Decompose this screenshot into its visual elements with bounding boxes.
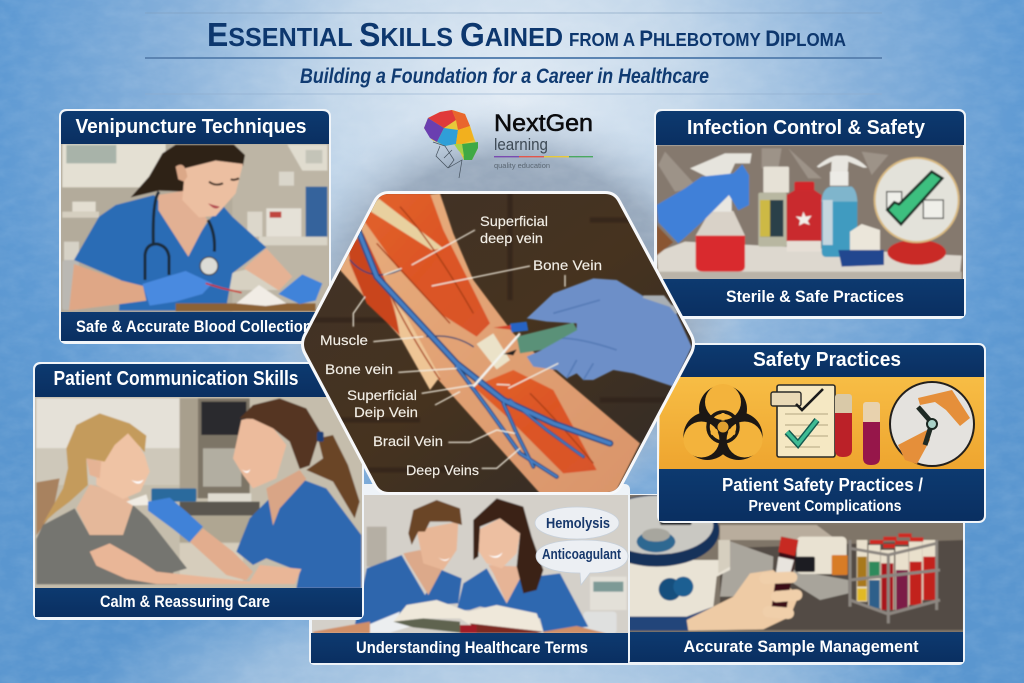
- blue box: [838, 250, 884, 267]
- needle and gauze: [206, 283, 242, 293]
- muscles: [363, 193, 490, 337]
- bottle one: [763, 167, 789, 193]
- icon: polygon brain: [424, 110, 478, 178]
- icon: blood tubes: [835, 394, 880, 465]
- header: [660, 345, 984, 377]
- heading continuation: FROM A PHLEBOTOMY DIPLOMA: [569, 26, 846, 51]
- stethoscope: [145, 192, 215, 280]
- red bottle: [794, 182, 814, 191]
- tagline: quality education: [494, 161, 550, 170]
- caption: Calm & Reassuring Care: [100, 593, 270, 611]
- wordmark second line: learning: [494, 135, 548, 154]
- nurse arms: [190, 528, 253, 580]
- syringe: [517, 323, 577, 353]
- title block: [145, 12, 882, 94]
- nurse hair: [240, 398, 320, 469]
- photo: two students with a book: [310, 490, 630, 637]
- banner: [659, 377, 984, 469]
- veins: [350, 227, 610, 477]
- male student: [355, 555, 462, 625]
- footer: [612, 632, 963, 662]
- check badge: [887, 240, 946, 265]
- arm: [340, 193, 640, 493]
- term: Anticoagulant: [542, 547, 621, 563]
- header: [61, 111, 329, 144]
- arms: [313, 622, 607, 633]
- text: Deip Vein: [354, 404, 418, 420]
- patient: [36, 505, 187, 584]
- nurse neck: [266, 470, 306, 526]
- label: Superficial deep vein: [480, 213, 548, 246]
- rainbow rule: [494, 156, 593, 157]
- face: [182, 161, 243, 217]
- panel: arm anatomy hexagon: [295, 190, 700, 500]
- female student: [457, 568, 588, 632]
- glove: [148, 498, 203, 542]
- label: Bracil Vein: Bracil Vein: [373, 433, 443, 449]
- heading: Patient Communication Skills: [54, 367, 298, 390]
- centrifuge: [627, 560, 730, 617]
- gloved hand holding tube: [687, 570, 798, 631]
- gloves: [142, 271, 212, 306]
- label: Muscle: Muscle: [320, 332, 368, 348]
- footer: [659, 469, 984, 521]
- heading: ESSENTIAL SKILLS GAINED: [207, 16, 563, 53]
- caption: Understanding Healthcare Terms: [356, 639, 588, 657]
- neck and chest: [158, 190, 207, 257]
- label: Bone vein: Bone vein: [325, 361, 393, 377]
- footer: [61, 312, 329, 341]
- header: [35, 364, 362, 397]
- panel: infection control: [654, 109, 966, 319]
- white box: [850, 224, 880, 250]
- text: deep vein: [480, 230, 543, 246]
- footer: [311, 633, 628, 663]
- panel: venipuncture techniques: [59, 109, 331, 344]
- caption: Safe & Accurate Blood Collection: [76, 318, 312, 336]
- photo: centrifuge and rack: [630, 495, 963, 632]
- icon: hand with tourniquet: [890, 382, 974, 466]
- panel: patient communication: [33, 362, 365, 620]
- label: Deep Veins: Deep Veins: [406, 462, 479, 478]
- speech bubble: Hemolysis: [535, 507, 619, 539]
- caption: Accurate Sample Management: [684, 638, 919, 656]
- photo: nurse drawing blood: [59, 140, 331, 315]
- glove: [527, 278, 692, 387]
- caption: Sterile & Safe Practices: [726, 288, 904, 306]
- speech bubble: Anticoagulant: [536, 540, 628, 585]
- torso: [74, 195, 266, 311]
- logo: NextGen learning: [424, 110, 593, 178]
- arms: [69, 264, 146, 311]
- spray bottle: [695, 210, 746, 238]
- rack tubes: [857, 540, 867, 602]
- term: Hemolysis: [546, 516, 610, 532]
- pump bottle: [817, 156, 867, 172]
- heading: Safety Practices: [753, 348, 901, 371]
- heading: Infection Control & Safety: [687, 116, 926, 139]
- footer: [35, 588, 362, 617]
- book: [393, 600, 543, 632]
- photo: nurse reassuring patient: [33, 395, 365, 590]
- nurse torso: [236, 478, 361, 588]
- ponytail: [306, 435, 360, 518]
- icon: checklist: [771, 385, 835, 457]
- nurse face: [233, 415, 286, 488]
- leader lines: [353, 230, 565, 468]
- caption line 1: Patient Safety Practices /: [722, 475, 923, 495]
- wordmark: NextGen: [494, 110, 593, 137]
- photo: disinfection supplies: [655, 145, 965, 280]
- footer: [656, 279, 964, 316]
- panel: safety practices: [657, 343, 986, 523]
- tendon wrap: [477, 333, 510, 369]
- header: [656, 111, 964, 145]
- heading: Venipuncture Techniques: [76, 115, 306, 138]
- table: [176, 303, 316, 311]
- label: Bone Vein top: Bone Vein: [533, 257, 602, 273]
- glove: [657, 164, 749, 243]
- text: Superficial: [347, 387, 417, 403]
- caption line 2: Prevent Complications: [748, 498, 902, 515]
- icon: biohazard: [683, 384, 763, 460]
- hexagon frame: [301, 191, 695, 495]
- panel: healthcare terms: [309, 484, 630, 665]
- hair: [131, 145, 245, 197]
- shelf: [657, 242, 962, 273]
- text: Superficial: [480, 213, 548, 229]
- label: Superficial Deip Vein: [347, 387, 418, 420]
- panel: sample management: [594, 493, 967, 665]
- subtitle: Building a Foundation for a Career in Healthcare: [300, 65, 709, 88]
- illustration: [295, 190, 700, 500]
